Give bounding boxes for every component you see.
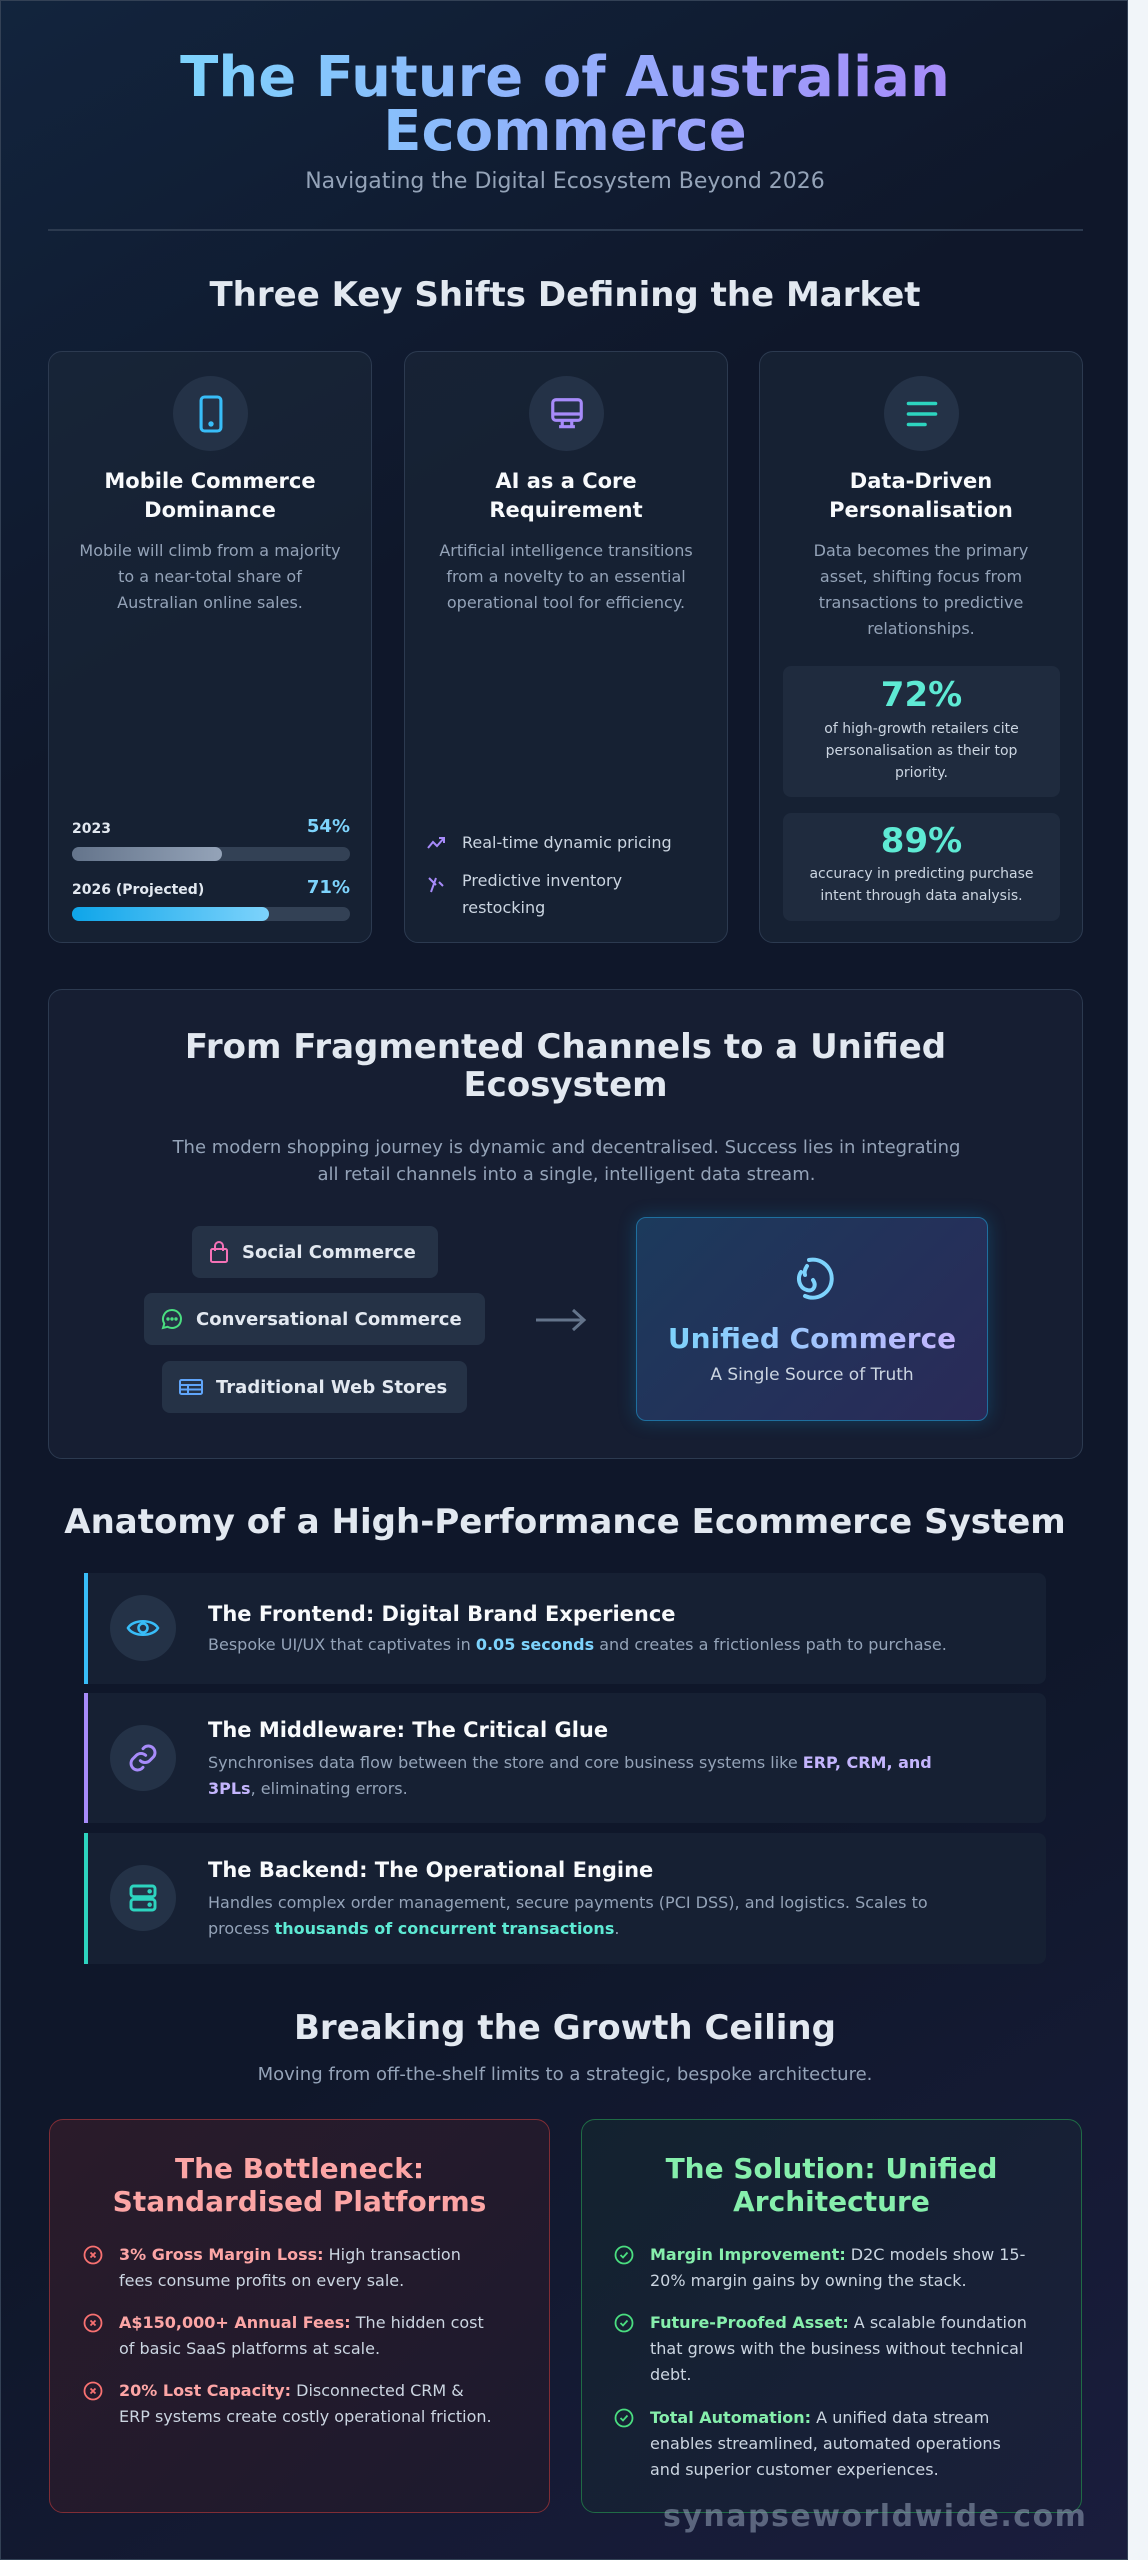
paragraph: all retail channels into a single, intelligent data stream.	[318, 1164, 815, 1185]
item: enables streamlined, automated operations	[650, 2434, 1001, 2453]
stat: 72%: of high-growth retailers cite personalisation as their top priority.	[824, 721, 1019, 781]
item: Future-Proofed Asset: A scalable foundation	[650, 2313, 1027, 2332]
paragraph	[172, 1137, 960, 1185]
row: frontend: Bespoke UI/UX that captivates in 0.05 seconds and creates a frictionless path to purchase.	[208, 1635, 947, 1654]
item: and superior customer experiences.	[650, 2460, 939, 2479]
bullet list	[427, 833, 672, 917]
unified commerce box: Unified Commerce	[668, 1322, 956, 1355]
row: frontend: The Frontend: Digital Brand Experience	[208, 1602, 676, 1626]
stat: 72%: 72%	[881, 675, 962, 715]
icon: lines	[884, 376, 959, 451]
panel: AI	[404, 351, 728, 943]
item	[84, 2381, 492, 2426]
item: A$150,000+ Annual Fees: The hidden cost	[119, 2313, 484, 2332]
panel: solution: Architecture	[733, 2185, 930, 2218]
panel: bottleneck	[49, 2119, 550, 2513]
item	[614, 2408, 1001, 2479]
card description	[79, 541, 341, 612]
row: middleware: 3PLs, eliminating errors.	[208, 1779, 408, 1798]
panel: bottleneck: The Bottleneck:	[175, 2152, 424, 2185]
row: middleware	[84, 1693, 1046, 1823]
panel: solution: The Solution: Unified	[666, 2152, 997, 2185]
icon: link	[110, 1725, 176, 1791]
panel: unified ecosystem	[48, 989, 1083, 1459]
bar chart: 71%	[307, 877, 350, 898]
pill: conversational	[144, 1293, 485, 1345]
panel: bottleneck: Standardised Platforms	[113, 2185, 486, 2218]
pill: social: Social Commerce	[242, 1242, 416, 1262]
card description: to a near-total share of	[118, 567, 302, 586]
item: ERP systems create costly operational friction.	[119, 2407, 492, 2426]
bar chart: 2023	[72, 821, 111, 837]
title	[176, 51, 954, 159]
item	[614, 2313, 1027, 2384]
item: Total Automation: A unified data stream	[650, 2408, 989, 2427]
card description: Australian online sales.	[117, 593, 303, 612]
item	[84, 2245, 461, 2290]
bar chart: 2026 (Projected)	[72, 882, 204, 898]
arrow	[536, 1309, 586, 1331]
heading	[185, 1027, 946, 1105]
row: frontend	[84, 1573, 1046, 1684]
card title	[829, 469, 1013, 522]
heading: three key shifts: Three Key Shifts Defining the Market	[209, 275, 921, 315]
item: Margin Improvement: D2C models show 15-	[650, 2245, 1025, 2264]
card title: Requirement	[489, 498, 643, 522]
card description: Mobile will climb from a majority	[79, 541, 341, 560]
subtitle: Moving from off-the-shelf limits to a strategic, bespoke architecture.	[258, 2064, 872, 2085]
bullet list: Predictive inventory restocking	[462, 871, 622, 917]
card title	[104, 469, 316, 522]
bullet list: Real-time dynamic pricing	[462, 833, 672, 852]
heading: Ecosystem	[463, 1065, 668, 1105]
item: of basic SaaS platforms at scale.	[119, 2339, 380, 2358]
card title	[489, 469, 643, 522]
panel: solution	[581, 2119, 1082, 2513]
heading: growth ceiling: Breaking the Growth Ceiling	[294, 2008, 836, 2048]
icon: server	[110, 1865, 176, 1931]
card title: Mobile Commerce	[104, 469, 316, 493]
title: The Future of Australian	[180, 45, 950, 110]
row: middleware: Synchronises data flow between the store and core business systems like ERP, CRM, and	[208, 1753, 932, 1772]
unified commerce box	[636, 1217, 988, 1421]
panel: data-driven	[759, 351, 1083, 943]
item: 3% Gross Margin Loss: High transaction	[119, 2245, 461, 2264]
paragraph: The modern shopping journey is dynamic and decentralised. Success lies in integrating	[173, 1137, 960, 1158]
pill: social	[192, 1226, 438, 1278]
item: 20% margin gains by owning the stack.	[650, 2271, 967, 2290]
icon: monitor	[529, 376, 604, 451]
card title: Data-Driven	[850, 469, 992, 493]
pill: web stores	[162, 1361, 467, 1413]
row: backend	[84, 1833, 1046, 1964]
bar chart: 54%	[307, 816, 350, 837]
heading: anatomy: Anatomy of a High-Performance Ecommerce System	[64, 1502, 1066, 1542]
item: 20% Lost Capacity: Disconnected CRM &	[119, 2381, 464, 2400]
title: Ecommerce	[383, 99, 747, 164]
pill: web stores: Traditional Web Stores	[216, 1376, 447, 1398]
row: backend: The Backend: The Operational Engine	[208, 1858, 653, 1882]
bar chart	[72, 816, 350, 921]
icon: eye	[110, 1595, 176, 1661]
row: middleware: The Middleware: The Critical Glue	[208, 1718, 608, 1742]
card description: Data becomes the primary asset, shifting focus from transactions to predictive relationships.	[814, 541, 1028, 638]
card title: AI as a Core	[495, 469, 637, 493]
pill: conversational: Conversational Commerce	[196, 1308, 462, 1330]
item: debt.	[650, 2365, 692, 2384]
watermark: synapseworldwide.com	[663, 2499, 1087, 2534]
panel: mobile commerce	[48, 351, 372, 943]
icon: phone	[173, 376, 248, 451]
icon: fingerprint	[796, 1258, 834, 1300]
item: fees consume profits on every sale.	[119, 2271, 404, 2290]
heading: From Fragmented Channels to a Unified	[185, 1027, 946, 1067]
unified commerce box: A Single Source of Truth	[710, 1365, 914, 1385]
row: backend: process thousands of concurrent transactions.	[208, 1919, 619, 1938]
row: backend: Handles complex order management, secure payments (PCI DSS), and logistics. Scales to	[208, 1893, 928, 1912]
card description: Artificial intelligence transitions from a novelty to an essential operational tool for efficiency.	[439, 541, 693, 612]
item: that grows with the business without technical	[650, 2339, 1023, 2358]
item	[614, 2245, 1025, 2290]
card title: Dominance	[144, 498, 276, 522]
stat: 72%	[783, 666, 1060, 797]
stat: 89%: 89%	[881, 821, 962, 861]
item	[84, 2313, 484, 2358]
subtitle: Navigating the Digital Ecosystem Beyond 2026	[305, 169, 825, 194]
stat: 89%	[783, 813, 1060, 921]
stat: 89%: accuracy in predicting purchase intent through data analysis.	[809, 866, 1034, 904]
card title: Personalisation	[829, 498, 1013, 522]
